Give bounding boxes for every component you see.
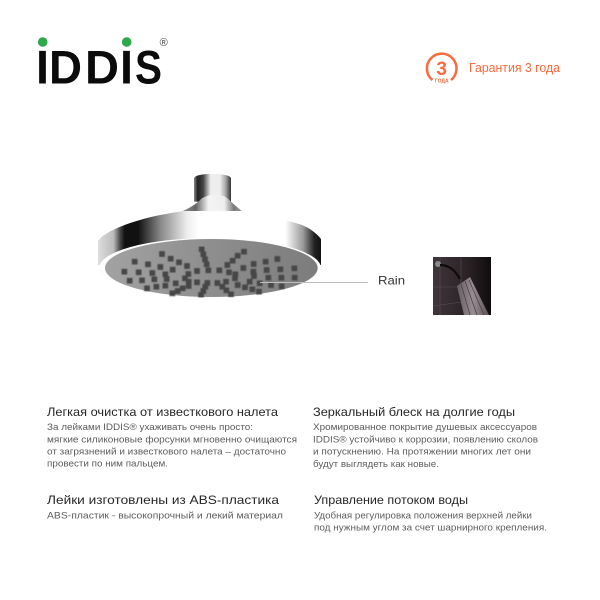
- rim: [99, 238, 321, 298]
- warranty badge: [427, 54, 560, 84]
- panel: mirror shine: [313, 405, 538, 469]
- logo letters: I: [120, 40, 133, 94]
- panel: water flow control: [314, 493, 547, 532]
- panel: easy cleaning: [47, 405, 297, 468]
- heading: Лейки изготовлены из ABS-пластика: [47, 493, 279, 507]
- leader line: [260, 282, 368, 284]
- photo: shower in use: [433, 257, 491, 315]
- logo: IDDIS: [36, 37, 168, 94]
- icon: 3 year circle: ГОДА: [435, 78, 449, 84]
- face: [105, 239, 318, 297]
- body text: За лейками IDDIS® ухаживать очень просто:: [47, 422, 253, 432]
- panel: ABS plastic: [47, 493, 283, 520]
- body text: провести по ним пальцем.: [47, 458, 168, 468]
- body text: от загрязнений и известкового налета – достаточно: [47, 446, 286, 456]
- logo letters: I: [36, 40, 49, 94]
- heading: Легкая очистка от известкового налета: [47, 405, 278, 419]
- logo letters: [36, 40, 162, 94]
- body text: будут выглядеть как новые.: [313, 459, 439, 469]
- body text: [314, 510, 547, 532]
- body text: [47, 422, 297, 468]
- icon: 3 year circle: [427, 54, 456, 84]
- body text: ABS-пластик - высокопрочный и лекий материал: [47, 510, 283, 520]
- product: shower head: [98, 174, 321, 298]
- head body: [98, 211, 321, 265]
- logo letters: S: [135, 40, 162, 94]
- logo letters: D: [49, 40, 82, 94]
- warranty label: Гарантия 3 года: [469, 61, 560, 75]
- logo letters: D: [85, 40, 119, 94]
- nozzles: [124, 249, 295, 295]
- body text: Хромированное покрытие душевых аксессуаров: [313, 422, 537, 432]
- neck: [194, 174, 231, 202]
- body text: [313, 422, 538, 469]
- heading: Зеркальный блеск на долгие годы: [313, 405, 515, 419]
- body text: Удобная регулировка положения верхней лейки: [314, 510, 532, 520]
- callout label: Rain: [378, 274, 405, 288]
- body text: и потускнению. На протяжении многих лет они: [313, 446, 531, 456]
- body text: под нужным углом за счет шарнирного крепления.: [314, 522, 547, 532]
- heading: Управление потоком воды: [314, 493, 468, 507]
- body text: мягкие силиконовые форсунки мгновенно очищаются: [47, 434, 297, 444]
- icon: 3 year circle: 3: [436, 59, 447, 80]
- flange: [180, 195, 243, 212]
- body text: IDDIS® устойчиво к коррозии, появлению сколов: [313, 434, 538, 444]
- registered mark: ®: [160, 37, 168, 49]
- logo green dots: [38, 37, 132, 47]
